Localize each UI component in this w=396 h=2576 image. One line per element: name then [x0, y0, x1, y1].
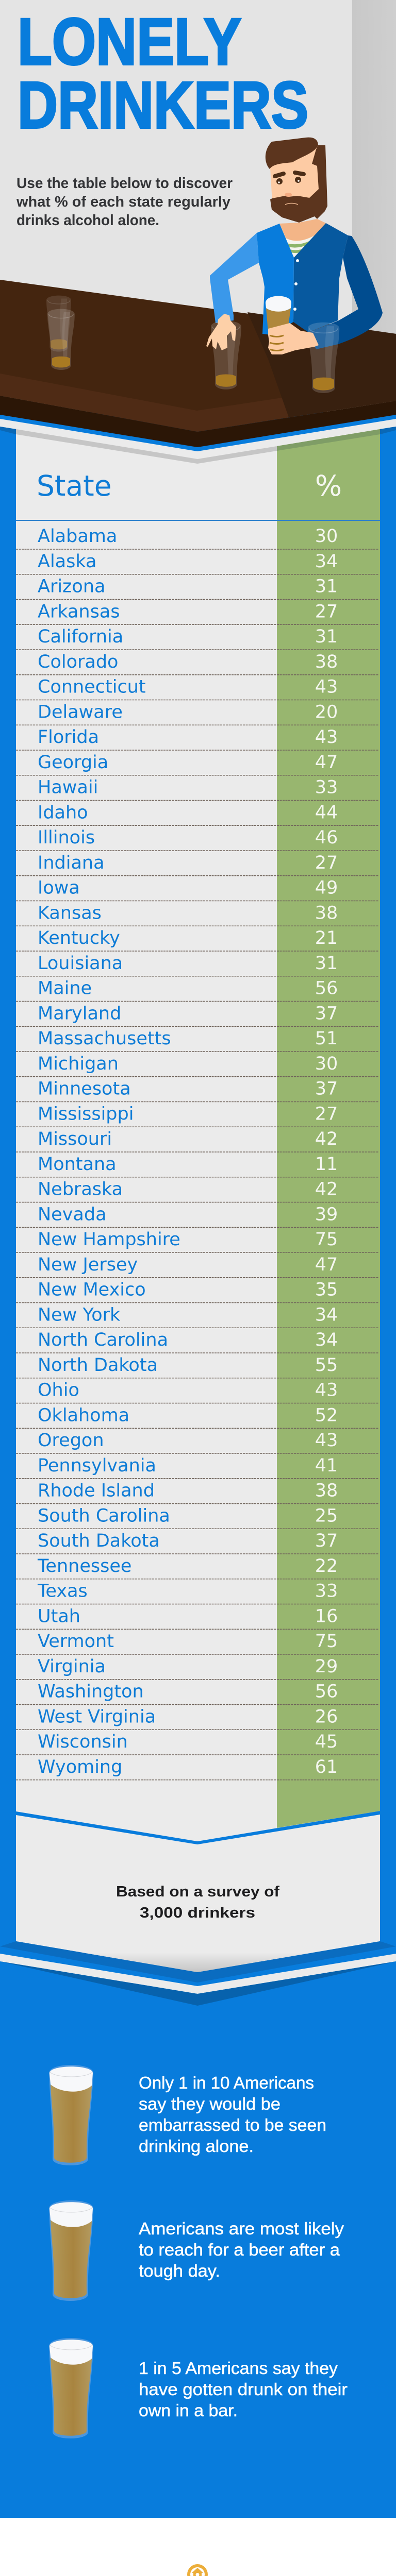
row: New Jersey	[16, 1255, 379, 1278]
row: Arkansas: 27	[315, 601, 338, 622]
row: Rhode Island: Rhode Island	[38, 1481, 155, 1501]
row: North Dakota	[16, 1355, 379, 1378]
nose and mouth	[285, 193, 298, 205]
row: Maine	[16, 978, 379, 1002]
survey note	[116, 1884, 279, 1921]
row: Missouri	[16, 1129, 379, 1152]
buttons	[293, 259, 299, 311]
row: South Dakota: 37	[315, 1531, 338, 1551]
table header: %	[315, 469, 342, 502]
panel: header background	[0, 0, 396, 422]
row: Florida: 43	[315, 727, 338, 748]
row: Rhode Island: 38	[315, 1481, 338, 1501]
row: Arizona: Arizona	[38, 576, 105, 597]
row: Nevada	[16, 1204, 379, 1227]
icon: beer	[50, 2065, 93, 2165]
row: Minnesota: Minnesota	[38, 1079, 131, 1099]
fact 2	[50, 2201, 344, 2300]
row: Colorado	[16, 652, 379, 675]
text	[139, 2219, 344, 2280]
row: Mississippi: Mississippi	[38, 1104, 134, 1124]
survey note: Based on a survey of	[116, 1884, 279, 1900]
row: Colorado: Colorado	[38, 652, 118, 672]
row: Connecticut: Connecticut	[38, 677, 146, 698]
row: Alaska	[16, 551, 379, 574]
row: Georgia: 47	[315, 752, 338, 773]
row: Washington: 56	[315, 1682, 338, 1702]
row: Minnesota: 37	[315, 1079, 338, 1099]
row: Virginia: 29	[315, 1656, 338, 1677]
row: Tennessee	[16, 1556, 379, 1579]
row: South Dakota: South Dakota	[38, 1531, 160, 1551]
eyes	[276, 177, 301, 184]
row: Georgia	[16, 752, 379, 775]
row: Alabama: Alabama	[38, 526, 117, 547]
row: Texas: 33	[315, 1581, 338, 1601]
row: Colorado: 38	[315, 652, 338, 672]
row: Florida	[16, 727, 379, 750]
row: South Carolina: 25	[315, 1505, 338, 1526]
neck	[279, 219, 326, 259]
row: Wyoming: 61	[315, 1757, 338, 1777]
row: North Dakota: North Dakota	[38, 1355, 158, 1376]
row: Missouri: Missouri	[38, 1129, 112, 1149]
row: Washington: Washington	[38, 1682, 144, 1702]
text: drinking alone.	[139, 2137, 254, 2156]
row: Pennsylvania: 41	[315, 1455, 338, 1476]
row: Indiana: 27	[315, 853, 338, 873]
survey note: 3,000 drinkers	[140, 1905, 255, 1921]
row: Kansas	[16, 903, 379, 926]
row: Illinois	[16, 827, 379, 851]
row: Massachusetts: 51	[315, 1028, 338, 1049]
row: Rhode Island	[16, 1481, 379, 1503]
beard	[270, 145, 327, 223]
row: California: 31	[315, 626, 338, 647]
icon: left hand	[206, 314, 236, 350]
text	[139, 2359, 348, 2420]
text: to reach for a beer after a	[139, 2240, 340, 2259]
text: Only 1 in 10 Americans	[139, 2073, 314, 2092]
text	[139, 2073, 326, 2156]
text: have gotten drunk on their	[139, 2380, 348, 2399]
row: Georgia: Georgia	[38, 752, 108, 773]
row: Indiana: Indiana	[38, 853, 105, 873]
row: Wisconsin	[16, 1732, 379, 1755]
row: Oregon	[16, 1430, 379, 1453]
figure: man	[210, 138, 383, 349]
right arm	[308, 235, 383, 349]
row: Montana	[16, 1154, 379, 1177]
row: Oregon: Oregon	[38, 1430, 104, 1451]
table rows	[16, 526, 379, 1780]
row: Wisconsin: Wisconsin	[38, 1732, 128, 1752]
lower chevrons	[0, 1941, 396, 2006]
eyebrows	[275, 173, 304, 176]
row: Alabama	[16, 526, 379, 549]
row: Pennsylvania: Pennsylvania	[38, 1455, 156, 1476]
row: New Jersey: New Jersey	[38, 1255, 138, 1275]
row: Ohio	[16, 1380, 379, 1403]
row: Utah: Utah	[38, 1606, 80, 1626]
row: Nebraska	[16, 1179, 379, 1202]
row: Tennessee: Tennessee	[37, 1556, 131, 1577]
table top shadow	[0, 427, 396, 464]
hair	[266, 138, 318, 169]
row: New York: New York	[38, 1304, 121, 1325]
row: Oklahoma: Oklahoma	[38, 1405, 129, 1426]
row: Iowa	[16, 878, 379, 901]
row: Delaware: Delaware	[38, 702, 123, 722]
row: Nebraska: 42	[315, 1179, 338, 1199]
row: California: California	[38, 626, 123, 647]
row: Tennessee: 22	[315, 1556, 338, 1577]
row: Kentucky	[16, 928, 379, 951]
row: Ohio: 43	[315, 1380, 338, 1400]
row: Alaska: Alaska	[38, 551, 96, 572]
row: Alabama: 30	[315, 526, 338, 547]
row: Louisiana	[16, 953, 379, 976]
row: Michigan: 30	[315, 1054, 338, 1074]
row: Washington	[16, 1682, 379, 1704]
row: North Carolina: North Carolina	[38, 1330, 168, 1350]
row: West Virginia: 26	[315, 1706, 338, 1727]
row: Mississippi: 27	[315, 1104, 338, 1124]
row: Vermont: Vermont	[38, 1631, 114, 1652]
cardigan right panel	[293, 223, 348, 332]
table end chevron	[16, 1811, 380, 1844]
intro text: Use the table below to discover	[16, 175, 233, 192]
row: West Virginia	[16, 1706, 379, 1730]
row: Kansas: 38	[315, 903, 338, 923]
icon: empty glass far left	[46, 296, 71, 352]
row: Arizona: 31	[315, 576, 338, 597]
row: Iowa: 49	[315, 878, 338, 899]
row: Maryland: Maryland	[38, 1003, 121, 1024]
cardigan left panel	[257, 224, 294, 335]
row: Oklahoma: 52	[315, 1405, 338, 1426]
row: Kansas: Kansas	[38, 903, 102, 923]
row: South Carolina: South Carolina	[38, 1505, 170, 1526]
row: Wisconsin: 45	[315, 1732, 338, 1752]
row: Nebraska: Nebraska	[38, 1179, 123, 1199]
row: South Dakota	[16, 1531, 379, 1554]
row: Illinois: Illinois	[38, 827, 95, 848]
row: Michigan	[16, 1054, 379, 1077]
row: Texas: Texas	[37, 1581, 88, 1601]
row: Mississippi	[16, 1104, 379, 1127]
row: California	[16, 626, 379, 650]
row: Maine: Maine	[38, 978, 92, 998]
row: Wyoming	[16, 1757, 379, 1780]
text: 1 in 5 Americans say they	[139, 2359, 338, 2378]
row: Iowa: Iowa	[38, 878, 80, 899]
icon: right hand holding beer	[268, 323, 319, 354]
row: Pennsylvania	[16, 1455, 379, 1479]
panel: table background	[0, 419, 396, 1972]
row: Montana: 11	[315, 1154, 338, 1175]
logo	[75, 2564, 321, 2576]
text: own in a bar.	[139, 2401, 238, 2420]
title: LONELY	[18, 5, 241, 79]
row: Nevada: 39	[315, 1204, 338, 1225]
text: embarrassed to be seen	[139, 2115, 326, 2134]
bar counter	[0, 280, 396, 447]
row: Louisiana: Louisiana	[38, 953, 123, 974]
row: Ohio: Ohio	[38, 1380, 79, 1400]
row: Minnesota	[16, 1079, 379, 1101]
row: Oregon: 43	[315, 1430, 338, 1451]
fact 3	[50, 2338, 348, 2438]
intro text	[16, 175, 233, 229]
row: Hawaii: 33	[315, 777, 338, 798]
row: New Hampshire	[16, 1229, 379, 1252]
row: Texas	[16, 1581, 379, 1604]
row: Kentucky: Kentucky	[38, 928, 120, 948]
row: Michigan: Michigan	[38, 1054, 119, 1074]
row: Florida: Florida	[38, 727, 99, 748]
row: New Mexico: New Mexico	[38, 1280, 146, 1300]
row: Maryland	[16, 1003, 379, 1026]
row: West Virginia: West Virginia	[38, 1706, 156, 1727]
row: Illinois: 46	[315, 827, 338, 848]
text: tough day.	[139, 2261, 220, 2280]
table header	[16, 469, 380, 521]
row: Utah: 16	[315, 1606, 338, 1626]
row: Connecticut: 43	[315, 677, 338, 698]
row: Missouri: 42	[315, 1129, 338, 1149]
row: Wyoming: Wyoming	[38, 1757, 122, 1777]
icon: beer	[50, 2338, 93, 2438]
row: New Hampshire: 75	[315, 1229, 338, 1250]
striped shirt	[284, 235, 315, 259]
row: Vermont: 75	[315, 1631, 338, 1652]
row: Virginia: Virginia	[38, 1656, 106, 1677]
row: Vermont	[16, 1631, 379, 1654]
row: Idaho: 44	[315, 802, 338, 823]
intro text: drinks alcohol alone.	[16, 212, 159, 229]
row: North Dakota: 55	[315, 1355, 338, 1376]
row: Connecticut	[16, 677, 379, 700]
row: Arizona	[16, 576, 379, 600]
row: North Carolina	[16, 1330, 379, 1353]
row: Alaska: 34	[315, 551, 338, 572]
row: Utah	[16, 1606, 379, 1629]
row: New Jersey: 47	[315, 1255, 338, 1275]
row: Virginia	[16, 1656, 379, 1680]
row: New Mexico: 35	[315, 1280, 338, 1300]
row: New Hampshire: New Hampshire	[38, 1229, 180, 1250]
table header: State	[37, 469, 112, 502]
row: Delaware	[16, 702, 379, 725]
row: South Carolina	[16, 1505, 379, 1529]
icon: empty glass near left	[47, 309, 75, 370]
intro text: what % of each state regularly	[16, 194, 230, 210]
row: Idaho	[16, 802, 379, 825]
row: Louisiana: 31	[315, 953, 338, 974]
text: say they would be	[139, 2094, 280, 2113]
row: Oklahoma	[16, 1405, 379, 1428]
text: Americans are most likely	[139, 2219, 344, 2238]
row: Montana: Montana	[38, 1154, 117, 1175]
row: Kentucky: 21	[315, 928, 338, 948]
icon: empty glass centre	[211, 321, 241, 389]
row: Idaho: Idaho	[38, 802, 88, 823]
icon: house and person emblem	[187, 2564, 208, 2576]
left arm	[210, 233, 259, 323]
row: Massachusetts: Massachusetts	[38, 1028, 171, 1049]
face	[270, 144, 320, 204]
row: North Carolina: 34	[315, 1330, 338, 1350]
row: Indiana	[16, 853, 379, 876]
icon: empty glass right	[308, 323, 339, 393]
row: New York	[16, 1304, 379, 1328]
row: New York: 34	[315, 1304, 338, 1325]
row: Delaware: 20	[315, 702, 338, 722]
title	[18, 5, 308, 142]
fact 1	[50, 2065, 326, 2165]
row: Nevada: Nevada	[38, 1204, 107, 1225]
row: Hawaii: Hawaii	[38, 777, 98, 798]
row: Arkansas	[16, 601, 379, 624]
icon: beer	[50, 2201, 93, 2300]
title: DRINKERS	[18, 69, 308, 142]
icon: held beer	[266, 296, 291, 332]
row: Massachusetts	[16, 1028, 379, 1052]
row: Hawaii	[16, 777, 379, 801]
row: Maine: 56	[315, 978, 338, 998]
row: Maryland: 37	[315, 1003, 338, 1024]
row: Arkansas: Arkansas	[38, 601, 120, 622]
row: New Mexico	[16, 1280, 379, 1302]
panel: percent column	[277, 429, 380, 1828]
